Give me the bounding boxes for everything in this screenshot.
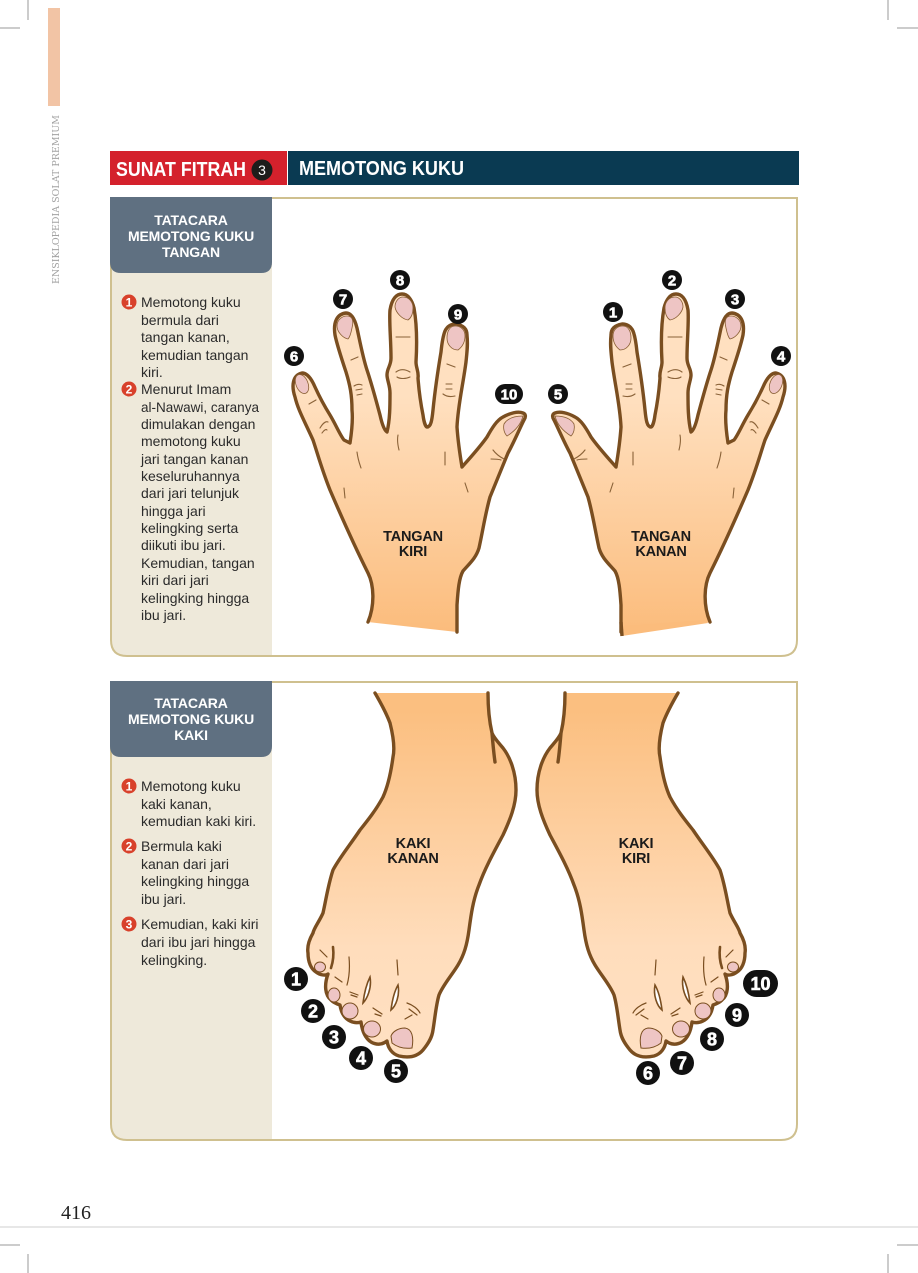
title bar: 3 <box>258 162 266 178</box>
panel: tatacara memotong kuku tangan <box>110 197 797 656</box>
instructions: tangan: memotong kuku <box>141 433 241 449</box>
illustration: left foot <box>537 693 778 1085</box>
instructions: kaki: 1 <box>126 780 133 794</box>
toe numbers 1 to 5: 3 <box>329 1028 339 1048</box>
instructions: kaki: Kemudian, kaki kiri <box>141 916 258 932</box>
instructions: tangan: 1 <box>126 296 133 310</box>
illustration: left hand: TANGAN <box>383 529 443 545</box>
toe numbers 6 to 10: 7 <box>677 1054 687 1074</box>
panel heading: kaki <box>110 681 272 757</box>
instructions: kaki: 3 <box>126 918 133 932</box>
instructions: tangan: ibu jari. <box>141 607 186 623</box>
illustration: left hand: KIRI <box>399 544 427 560</box>
finger numbers 6 to 10: 8 <box>396 272 404 290</box>
panel heading: tangan: TANGAN <box>162 244 220 260</box>
illustration: right hand <box>548 270 791 636</box>
toe numbers 6 to 10 <box>636 970 778 1085</box>
finger numbers 1 to 5: 4 <box>777 348 786 366</box>
panel heading: kaki: MEMOTONG KUKU <box>128 711 254 727</box>
toe numbers 6 to 10: 10 <box>750 974 771 994</box>
title bar: MEMOTONG KUKU <box>299 158 464 180</box>
title bar: SUNAT FITRAH <box>116 159 246 181</box>
page number: 416 <box>61 1202 91 1224</box>
illustration: left foot: KAKI <box>619 836 653 852</box>
instructions: tangan: Memotong kuku <box>141 294 241 310</box>
instructions: kaki: dari ibu jari hingga <box>141 934 256 950</box>
instructions: tangan: Kemudian, tangan <box>141 555 255 571</box>
illustration: right hand: KANAN <box>635 544 687 560</box>
finger numbers 6 to 10: 9 <box>454 306 462 324</box>
instructions: tangan: bermula dari <box>141 312 219 328</box>
instructions: tangan: Menurut Imam <box>141 381 231 397</box>
instructions: kaki: kaki kanan, <box>141 796 212 812</box>
instructions: tangan: kelingking hingga <box>141 590 249 606</box>
title bar <box>110 151 799 185</box>
panel: tatacara memotong kuku kaki <box>110 681 797 1140</box>
instructions: tangan: 2 <box>126 382 133 396</box>
instructions: tangan: dimulakan dengan <box>141 416 255 432</box>
finger numbers 1 to 5: 1 <box>609 304 617 322</box>
instructions: tangan: kiri dari jari <box>141 572 209 588</box>
instructions: kaki: Bermula kaki <box>141 838 222 854</box>
instructions: tangan: kemudian tangan <box>141 347 248 363</box>
toe numbers 1 to 5: 5 <box>391 1062 401 1082</box>
finger numbers 6 to 10: 6 <box>290 348 298 366</box>
instructions: tangan <box>122 294 259 623</box>
panel heading: tangan <box>110 197 272 273</box>
panel heading: kaki: KAKI <box>174 727 208 743</box>
instructions: tangan: keseluruhannya <box>141 468 240 484</box>
instructions: kaki <box>122 778 258 968</box>
instructions: kaki: Memotong kuku <box>141 778 241 794</box>
instructions: tangan: al-Nawawi, caranya <box>141 399 259 415</box>
panel heading: tangan: TATACARA <box>154 212 228 228</box>
illustration: right foot <box>284 693 516 1083</box>
illustration: right foot: KAKI <box>396 836 430 852</box>
toe numbers 1 to 5: 1 <box>291 970 301 990</box>
finger numbers 1 to 5: 5 <box>554 386 562 404</box>
instructions: kaki: kanan dari jari <box>141 856 229 872</box>
panel heading: kaki: TATACARA <box>154 695 228 711</box>
finger numbers 6 to 10: 10 <box>501 386 517 404</box>
finger numbers 1 to 5: 2 <box>668 272 676 290</box>
instructions: kaki: kelingking. <box>141 952 207 968</box>
illustration: left hand <box>284 270 525 632</box>
panel heading: tangan: MEMOTONG KUKU <box>128 228 254 244</box>
toe numbers 1 to 5 <box>284 967 408 1083</box>
salmon side tab <box>48 8 60 106</box>
illustration: right foot: KANAN <box>387 851 439 867</box>
toe numbers 6 to 10: 9 <box>732 1006 742 1026</box>
instructions: tangan: tangan kanan, <box>141 329 230 345</box>
instructions: tangan: kelingking serta <box>141 520 238 536</box>
toe numbers 1 to 5: 4 <box>356 1048 366 1068</box>
instructions: tangan: dari jari telunjuk <box>141 485 240 501</box>
toe numbers 1 to 5: 2 <box>308 1002 318 1022</box>
finger numbers 1 to 5: 3 <box>731 292 739 308</box>
instructions: kaki: kelingking hingga <box>141 873 249 889</box>
instructions: tangan: kiri. <box>141 364 163 380</box>
finger numbers 1 to 5 <box>548 270 791 404</box>
illustration: left foot: KIRI <box>622 851 650 867</box>
instructions: kaki: kemudian kaki kiri. <box>141 813 256 829</box>
toe numbers 6 to 10: 6 <box>643 1064 653 1084</box>
instructions: tangan: jari tangan kanan <box>140 451 248 467</box>
illustration: right hand: TANGAN <box>631 529 691 545</box>
finger numbers 6 to 10: 7 <box>339 292 347 308</box>
instructions: kaki: ibu jari. <box>141 891 186 907</box>
toe numbers 6 to 10: 8 <box>707 1030 717 1050</box>
instructions: tangan: hingga jari <box>141 503 206 519</box>
instructions: tangan: diikuti ibu jari. <box>141 537 226 553</box>
instructions: kaki: 2 <box>126 840 133 854</box>
running title, vertical: ENSIKLOPEDIA SOLAT PREMIUM <box>51 115 62 284</box>
finger numbers 6 to 10 <box>284 270 523 404</box>
